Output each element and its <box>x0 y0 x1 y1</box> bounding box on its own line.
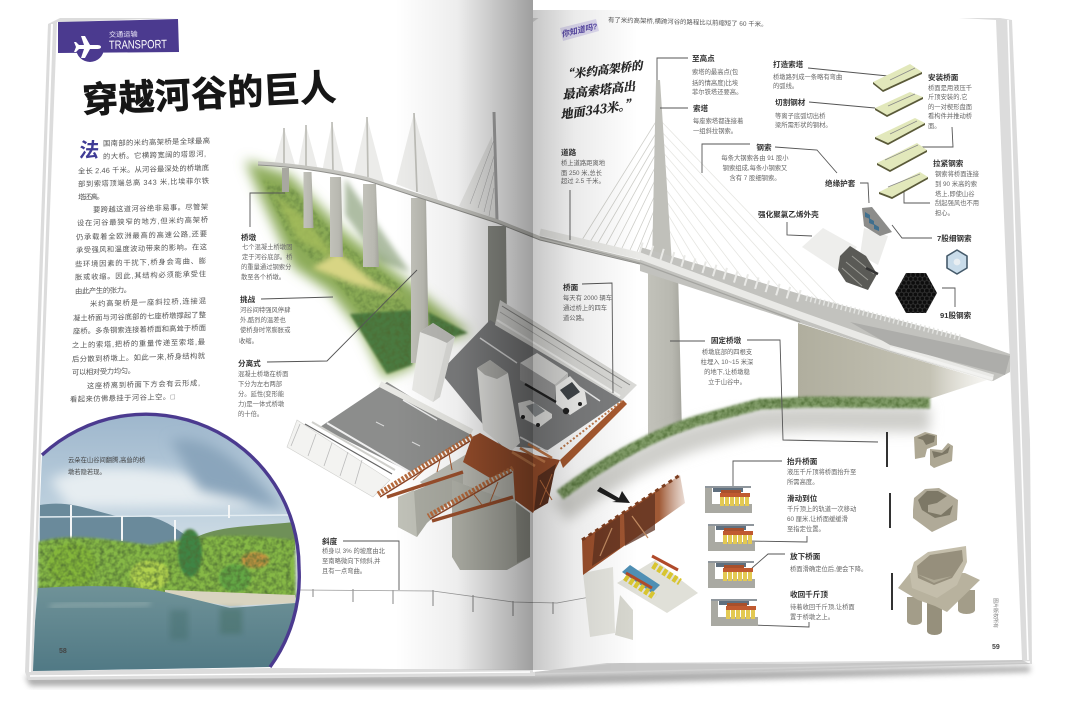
left carriageway <box>320 382 472 472</box>
label: highest point: 至高点 <box>692 53 715 63</box>
pier module base <box>898 546 980 635</box>
label: lift deck: 所需高度。 <box>787 477 818 486</box>
label: road: 桥上道路距离地 <box>561 158 606 167</box>
label: split pier <box>238 358 288 418</box>
inset: jacking mechanism <box>582 475 698 640</box>
drop cap: 法 <box>78 139 100 162</box>
book shadow <box>25 666 1030 686</box>
label: build pylon: 桥墩路列成一条略有弯曲 <box>773 72 842 81</box>
quote <box>559 57 645 123</box>
left page <box>33 0 533 671</box>
label: deck: 桥面 <box>563 282 579 292</box>
label: reinforced PVC shell: 强化聚氯乙烯外壳 <box>758 209 819 219</box>
label: lower deck: 放下桥面 <box>790 551 821 561</box>
body text: 设在河谷最狭窄的地方,但米约高架桥 <box>77 215 209 228</box>
label: slope: 且有一点弯曲。 <box>322 566 366 575</box>
hollow column two <box>477 360 520 452</box>
lower page curvature <box>535 660 1030 677</box>
label: steel cables: 每条大钢索各由 91 股小 <box>721 153 789 162</box>
label: split pier: 的十倍。 <box>238 409 263 418</box>
did you know <box>560 15 768 41</box>
label: build pylon: 打造索塔 <box>773 59 804 69</box>
green ridge <box>560 402 930 511</box>
concrete pillars under cut-away <box>398 452 530 570</box>
right barrier and railing <box>495 300 637 400</box>
left guard rail <box>287 420 395 497</box>
orange steel box girder <box>378 400 627 521</box>
label: 91-strand cable: 91股钢索 <box>940 310 972 320</box>
body text: 要跨越这道河谷绝非易事。尽管架 <box>93 202 208 214</box>
car <box>518 400 552 427</box>
label: piers: 散至各个桥墩。 <box>241 272 285 281</box>
label: fixed piers: 柱埋入 10~15 米深 <box>701 357 753 366</box>
label: piers: 桥墩 <box>241 232 257 242</box>
label: retract jacks <box>790 589 855 621</box>
construction bars <box>887 432 892 610</box>
main pier <box>648 270 682 436</box>
icon: 91-strand section <box>895 273 937 313</box>
label: challenge: 外,酷烈的温差也 <box>240 315 286 324</box>
photo caption: 墩若隐若现。 <box>68 467 106 476</box>
body text: 座桥。多条钢索连接着桥面和高耸于桥面 <box>73 323 206 336</box>
label: piers: 的重量通过钢索分 <box>241 262 292 271</box>
label: retract jacks: 待着收回千斤顶,让桥面 <box>790 602 855 611</box>
page number 59: 59 <box>992 644 1000 651</box>
category tag: TRANSPORT <box>109 37 168 52</box>
label: tension cables <box>933 158 980 217</box>
photo frame <box>42 414 299 667</box>
photo: valley with bridge <box>30 412 302 675</box>
label: fixed piers: 立于山谷中。 <box>708 377 746 386</box>
label: road: 道路 <box>561 147 577 157</box>
label: lift deck: 抬升桥面 <box>787 456 818 466</box>
body text: 凝土桥面与河谷底部的七座桥墩撑起了整 <box>73 310 207 323</box>
label: slide into place: 至指定位置。 <box>787 524 825 533</box>
label: lower deck: 桥面滑确定位后,便会下降。 <box>790 564 867 573</box>
label: pylon <box>693 103 743 135</box>
label: challenge: 河谷间特强风停肆 <box>240 305 291 314</box>
label: install deck: 面。 <box>928 122 941 130</box>
label: install deck: 斤顶安装的,它 <box>928 92 968 101</box>
cable fan of main pylon <box>582 120 850 318</box>
label: slide into place: 60 厘米,让桥面缓缓滑 <box>787 514 848 523</box>
near deck with rail lattice <box>540 232 1010 381</box>
body text: 些环境因素的干扰下,桥身会弯曲、膨 <box>75 256 206 269</box>
label: steel cables: 钢索 <box>756 142 772 152</box>
label: tension cables: 担心。 <box>935 208 954 217</box>
label: retract jacks: 置于桥墩之上。 <box>790 612 834 621</box>
body text: 可以相对受力均匀。 <box>72 366 135 377</box>
body text: 后分散到桥墩上。如此一来,桥身结构就 <box>72 351 206 364</box>
label: tension cables: 到 90 米高的索 <box>935 179 977 188</box>
body text: 塔还高。 <box>78 192 104 202</box>
photo caption <box>68 455 146 476</box>
label: deck <box>563 282 612 322</box>
label: piers: 七个混凝土桥墩固 <box>242 242 292 251</box>
label: slope: 至南略微向下倾斜,并 <box>322 556 380 565</box>
spine shading left <box>395 0 533 670</box>
truck <box>520 353 587 415</box>
label: split pier: 力)是一体式桥墩 <box>238 399 285 408</box>
category tag <box>58 19 179 62</box>
label: slope: 桥身以 3% 的坡度由北 <box>322 546 386 555</box>
label: highest point: 菲尔铁塔还要高。 <box>692 87 742 96</box>
label: cut steel: 等离子底弧切出桥 <box>775 111 826 120</box>
label: fixed piers <box>701 335 753 386</box>
label: fixed piers: 桥墩底部的四根支 <box>702 347 753 356</box>
label: split pier: 分。延性(变形能 <box>238 389 285 398</box>
label: deck: 道公路。 <box>563 313 588 322</box>
label: fixed piers: 固定桥墩 <box>711 335 742 345</box>
label: challenge: 使桥身时常膨胀或 <box>240 325 291 334</box>
label: cut steel: 切割钢材 <box>775 97 806 107</box>
label: 7-strand cable: 7股细钢索 <box>937 233 972 243</box>
label: pylon: 一组斜拉钢索。 <box>693 126 737 135</box>
label: install deck: 看构件并推动桥 <box>928 111 973 120</box>
label: lift deck <box>787 456 856 486</box>
deck construction stages <box>873 64 928 199</box>
label: highest point <box>692 53 742 96</box>
label: install deck <box>928 72 973 130</box>
right carriageway <box>440 320 622 452</box>
far piers <box>282 168 507 363</box>
label: build pylon: 的弧线。 <box>773 81 798 90</box>
quote: 地面343米。” <box>559 95 637 123</box>
label: tension cables: 塔上,即使山谷 <box>935 189 975 198</box>
body text: 部到索塔顶端总高 343 米,比埃菲尔铁 <box>78 176 210 189</box>
pier module top <box>914 432 953 468</box>
label: tension cables: 钢索将桥面连接 <box>935 169 980 178</box>
label: slide into place: 滑动到位 <box>787 493 818 503</box>
body text: 承受强风和温度波动带来的影响。在这 <box>76 242 208 255</box>
slope diagram <box>300 589 590 616</box>
label: tension cables: 刮起强风也不用 <box>935 198 979 207</box>
label: slide into place: 千斤顶上的轨道一次移动 <box>787 504 856 513</box>
body text: 胀或收缩。因此,其结构必须能承受住 <box>75 269 207 282</box>
main pylon <box>652 80 672 264</box>
label: retract jacks: 收回千斤顶 <box>790 589 828 599</box>
label: cut steel: 梁所需形状的钢材。 <box>775 120 832 129</box>
label: pylon: 每座索塔都连接着 <box>693 116 743 125</box>
label: install deck: 桥面是用液压千 <box>928 83 972 92</box>
label: lift deck: 液压千斤顶将桥面抬升至 <box>787 467 856 476</box>
label: steel cables: 含有 7 股细钢索。 <box>729 173 781 182</box>
label: lower deck <box>790 551 867 573</box>
label: steel cables <box>721 142 789 182</box>
quote: “米约高架桥的 <box>562 57 645 83</box>
label: slide into place <box>787 493 856 533</box>
label: split pier: 下分为左右两部 <box>238 379 282 388</box>
body text: 的大桥。它横跨宽阔的塔恩河, <box>103 149 206 161</box>
pier module middle <box>913 488 958 532</box>
icon: plane <box>74 36 101 58</box>
label: slope <box>322 536 386 575</box>
did you know: 你知道吗? <box>560 22 599 39</box>
label: piers <box>241 232 293 281</box>
label: deck: 通过桥上的四车 <box>563 303 607 312</box>
callout lines <box>250 58 955 627</box>
icon: 7-strand section <box>947 250 967 274</box>
label: piers: 定于河谷底部。桥 <box>242 252 293 261</box>
label: cut steel <box>775 97 832 129</box>
bridge deck far section <box>258 163 640 264</box>
body text: 仍承载着全欧洲最高的高速公路,还要 <box>76 229 207 242</box>
label: build pylon <box>773 59 842 90</box>
far pylons with cables <box>274 112 497 222</box>
label: highest point: 括的情高度)比埃 <box>692 78 739 87</box>
body text: 国南部的米约高架桥是全球最高 <box>103 136 210 148</box>
label: install deck: 的一对楔形盘面 <box>928 102 972 111</box>
label: challenge: 挑战 <box>240 294 256 304</box>
label: slope: 斜度 <box>322 536 338 546</box>
photo caption: 云朵在山谷间翻腾,高耸的桥 <box>68 455 146 464</box>
body text: 之上的索塔,把桥的重量传递至索塔,最 <box>72 337 206 350</box>
jack diagram 4 <box>711 599 758 626</box>
abutment <box>798 323 987 402</box>
label: road: 面 250 米,总长 <box>561 168 603 177</box>
cable cross-section illustration <box>802 207 892 290</box>
label: pylon: 索塔 <box>693 103 709 113</box>
jack diagram 1 <box>705 486 752 513</box>
jack diagram 3 <box>708 561 755 588</box>
label: challenge: 收缩。 <box>239 336 258 345</box>
label: road: 超过 2.5 千米。 <box>561 176 605 185</box>
label: split pier: 分离式 <box>238 358 261 368</box>
quote: 最高索塔高出 <box>561 77 637 103</box>
category tag: 交通运输 <box>109 29 138 39</box>
arrow <box>597 487 630 503</box>
spine shading right <box>533 10 638 670</box>
body text: 这座桥离到桥面下方会有云形成, <box>87 378 200 390</box>
body text <box>70 136 210 404</box>
body text: 全长 2.46 千米。从河谷最深处的桥墩底 <box>78 163 209 176</box>
jack diagram 2 <box>708 524 755 551</box>
label: split pier: 混凝土桥墩在桥面 <box>238 369 288 378</box>
small vertical credit: 图片版权所有 <box>992 598 999 628</box>
label: install deck: 安装桥面 <box>928 72 959 82</box>
label: highest point: 索塔的最高点(包 <box>692 67 739 76</box>
page number 58: 58 <box>59 648 67 655</box>
did you know: 有了米约高架桥,横跨河谷的路程比以前缩短了 60 千米。 <box>608 15 768 28</box>
label: steel cables: 钢索组成,每条小钢索又 <box>723 163 788 172</box>
label: tension cables: 拉紧钢索 <box>933 158 964 168</box>
body text: 由此产生的张力。 <box>75 285 131 296</box>
right page <box>533 0 1022 672</box>
label: fixed piers: 的地下,让桥墩稳 <box>704 367 751 376</box>
label: deck: 每天有 2000 辆车 <box>563 293 612 302</box>
title: 穿越河谷的巨人 <box>81 59 337 124</box>
label: insulation: 绝缘护套 <box>825 178 856 188</box>
hollow column one <box>412 323 455 402</box>
body text: 米约高架桥是一座斜拉桥,连接混 <box>90 296 207 308</box>
valley landscape <box>245 160 470 378</box>
label: challenge <box>239 294 291 345</box>
body text: 看起来仿佛悬挂于河谷上空。□ <box>70 392 176 404</box>
label: road <box>561 147 606 185</box>
